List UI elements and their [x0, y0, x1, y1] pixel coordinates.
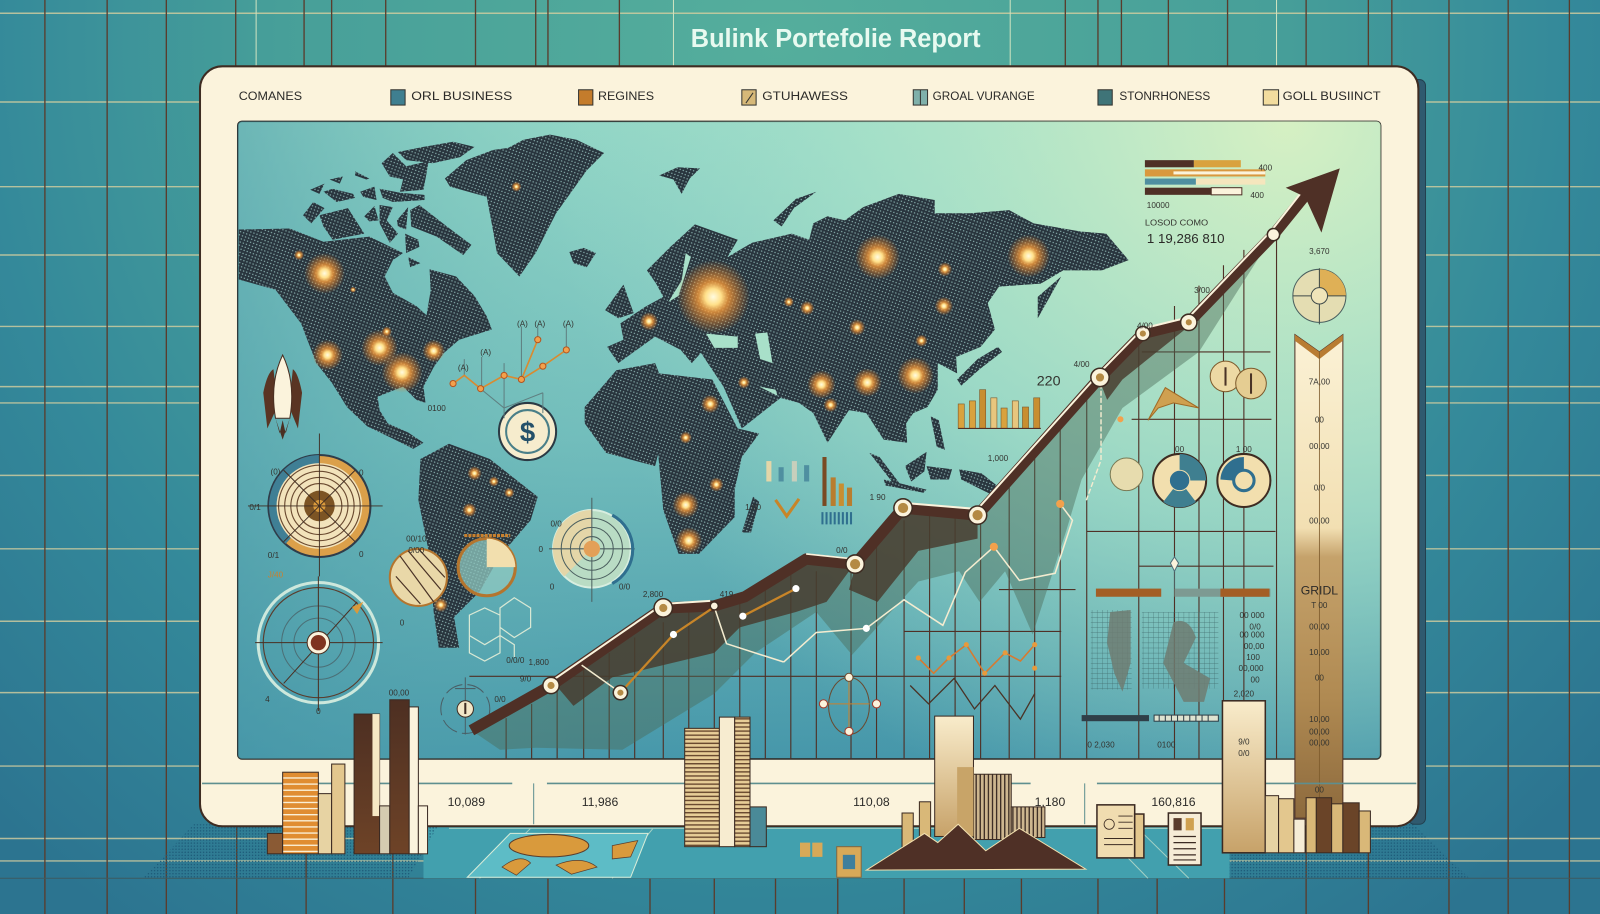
legend: stonrhoness: STONRHONESS	[1119, 89, 1210, 103]
trend value labels: 1 90	[870, 493, 886, 502]
small gauge: 00,00	[389, 689, 410, 698]
small line chart: (A)	[534, 319, 546, 328]
bar cluster centre with mountain	[866, 716, 1086, 870]
legend row	[239, 89, 1381, 105]
legend: gtuhawess: GTUHAWESS	[762, 89, 848, 103]
small line chart: 0100	[428, 404, 446, 413]
region map sketches	[1082, 557, 1270, 750]
trend value labels: 4/00	[1074, 360, 1090, 369]
region map sketches: 0100	[1157, 741, 1176, 750]
mini gold bar chart: 220	[1037, 374, 1061, 390]
coins	[1148, 361, 1266, 420]
title: Bulink Portefolie Report	[691, 25, 981, 53]
target ring chart: 0/1	[268, 551, 280, 560]
footer value strip	[202, 783, 1416, 824]
region map sketches: 100	[1246, 653, 1260, 662]
target ring chart: 0	[359, 550, 364, 559]
icon: dollar coin	[499, 403, 556, 460]
trend value labels: 419	[720, 590, 734, 599]
top right bar legend: 1 19,286 810	[1147, 231, 1224, 246]
small line chart: (A)	[480, 348, 491, 357]
small line chart	[428, 319, 574, 418]
coin dials over south america	[390, 535, 515, 627]
bar cluster centre left	[685, 717, 766, 847]
region map sketches: 00,00	[1244, 642, 1265, 651]
trend value labels: 1,000	[988, 454, 1009, 463]
dial chart: 0	[550, 583, 555, 592]
dial chart: 0/0	[619, 583, 631, 592]
target ring chart: (0)	[271, 467, 281, 476]
small line chart: (A)	[458, 363, 469, 372]
mountain silhouette	[866, 824, 1086, 870]
region map sketches: 2,020	[1234, 690, 1255, 699]
small gauge: 0/0	[494, 695, 506, 704]
radar chart: J/40	[268, 570, 284, 579]
target ring chart	[248, 434, 383, 576]
legend: oil business	[391, 89, 512, 105]
dial chart: 0/0	[550, 519, 562, 528]
icon: rocket	[263, 355, 302, 440]
small gauge	[389, 677, 506, 734]
legend: goll businect	[1263, 89, 1381, 105]
small line chart: (A)	[563, 319, 574, 328]
secondary line series	[582, 376, 1123, 693]
tall ribbon column: 10,00	[1309, 648, 1330, 657]
tall ribbon column: 10,00	[1309, 715, 1330, 724]
revenue hotspots	[294, 182, 1050, 612]
hexagon cluster	[469, 598, 531, 665]
tall ribbon column: 0/0	[1314, 484, 1326, 493]
tall ribbon column: 00	[1315, 786, 1324, 795]
inland seas	[668, 253, 778, 396]
region map sketches: 0/0	[1249, 622, 1261, 631]
coin dials over south america: 0	[400, 618, 405, 627]
small line chart: (A)	[517, 319, 528, 328]
trend value labels: 9/0	[520, 674, 532, 683]
tall ribbon column: 00	[1315, 415, 1324, 424]
top right bar legend: LOSOD COMO	[1145, 218, 1208, 227]
bar cluster right	[1222, 701, 1370, 853]
tall ribbon column: 7A,00	[1309, 378, 1331, 387]
trend value labels: 1 00	[745, 503, 761, 512]
coin dials over south america: 00/10	[406, 535, 427, 544]
dial chart	[539, 498, 635, 602]
radar chart: 4	[265, 695, 270, 704]
trend value labels: 1,800	[529, 658, 549, 667]
footer value: 1,180: 1,180	[1035, 795, 1066, 809]
madagascar	[742, 497, 759, 532]
region map sketches: 0 2,030	[1087, 741, 1115, 750]
dark shade under trend	[556, 326, 1189, 706]
target ring chart: 0/1	[249, 503, 261, 512]
top right bar legend: 400	[1259, 163, 1273, 172]
canadian arctic islands	[303, 142, 474, 267]
hexagon cluster: 0/0/0	[506, 656, 525, 665]
gauge dial	[1293, 247, 1346, 324]
top right bar legend: 10000	[1147, 201, 1170, 210]
region map sketches: 00	[1251, 675, 1260, 684]
eurasia	[607, 194, 1129, 443]
panel shadow edge	[1408, 80, 1426, 824]
floor map tile	[467, 833, 861, 877]
region map sketches: 00 000	[1240, 611, 1265, 620]
footer value: 110,08: 110,08	[853, 795, 890, 809]
trend value labels: 4/00	[1137, 321, 1153, 330]
legend: goll businect: GOLL BUSIINCT	[1283, 89, 1381, 103]
circle charts right: 1 00	[1236, 445, 1252, 454]
footer value: 160,816: 160,816	[1151, 795, 1196, 809]
south america	[418, 444, 538, 648]
trend value labels: 3/00	[1194, 286, 1210, 295]
tall ribbon column: 00	[1315, 673, 1324, 682]
tall ribbon column: 00,00	[1309, 727, 1330, 736]
legend: stonrhoness	[1098, 89, 1210, 105]
legend: regines	[579, 89, 654, 105]
tall ribbon column: 00,00	[1309, 739, 1330, 748]
dotted world map	[239, 135, 1129, 648]
legend: oil business: ORL BUSINESS	[411, 89, 512, 103]
radar chart: 0	[316, 707, 321, 716]
area shadow under trend	[471, 235, 1273, 750]
region map sketches: 00 000	[1240, 631, 1265, 640]
north america	[239, 228, 492, 449]
trend value labels: 0/0	[836, 546, 848, 555]
network line chart	[910, 642, 1037, 719]
mini gold bar chart	[958, 374, 1061, 428]
trend nodes	[543, 228, 1280, 700]
document bars	[1097, 805, 1201, 865]
mini bars near africa	[766, 457, 852, 524]
tall ribbon column: 00,00	[1309, 622, 1330, 631]
coin dials over south america: 0/00	[408, 546, 425, 555]
trend value labels	[520, 286, 1210, 683]
trend value labels: 2,800	[643, 590, 664, 599]
radar chart	[255, 570, 383, 716]
dial chart: 0	[539, 545, 544, 554]
tall ribbon column: 00,00	[1309, 516, 1330, 525]
legend: groal vurange: GROAL VURANGE	[933, 89, 1035, 103]
iceland, svalbard and uk	[569, 167, 700, 318]
greenland	[445, 135, 604, 276]
footer value: 10,089: 10,089	[448, 795, 485, 809]
legend: companies: COMANES	[239, 89, 302, 103]
map panel	[238, 121, 1381, 759]
icon: dollar coin: $	[520, 417, 535, 448]
floor surface	[143, 824, 1469, 878]
tall ribbon column	[1295, 335, 1343, 818]
legend: regines: REGINES	[598, 89, 654, 103]
legend: gtuhawess	[742, 89, 848, 105]
africa	[585, 363, 759, 554]
top right bar legend	[1145, 160, 1273, 246]
circle charts right	[1110, 445, 1270, 508]
gauge dial: 3,670	[1309, 247, 1330, 256]
top right bar legend: 400	[1250, 191, 1264, 200]
footer value: 11,986: 11,986	[582, 795, 618, 809]
circle charts right: 00	[1175, 445, 1185, 454]
target ring chart: 0	[359, 468, 364, 477]
chart grid	[469, 230, 1277, 759]
icon: globe	[819, 673, 881, 735]
bar cluster right: 9/0	[1238, 738, 1250, 747]
main cream panel	[200, 66, 1418, 826]
tall ribbon column: 00,00	[1309, 442, 1330, 451]
rising trend arrow	[471, 168, 1340, 730]
region map sketches: 00,000	[1239, 664, 1264, 673]
tall ribbon column: T 00	[1311, 601, 1328, 610]
tall ribbon column: GRIDL	[1301, 584, 1338, 598]
bar cluster left	[267, 700, 428, 854]
bar cluster right: 0/0	[1238, 749, 1250, 758]
novaya zemlya, kamchatka, japan, indonesia	[773, 192, 1061, 494]
